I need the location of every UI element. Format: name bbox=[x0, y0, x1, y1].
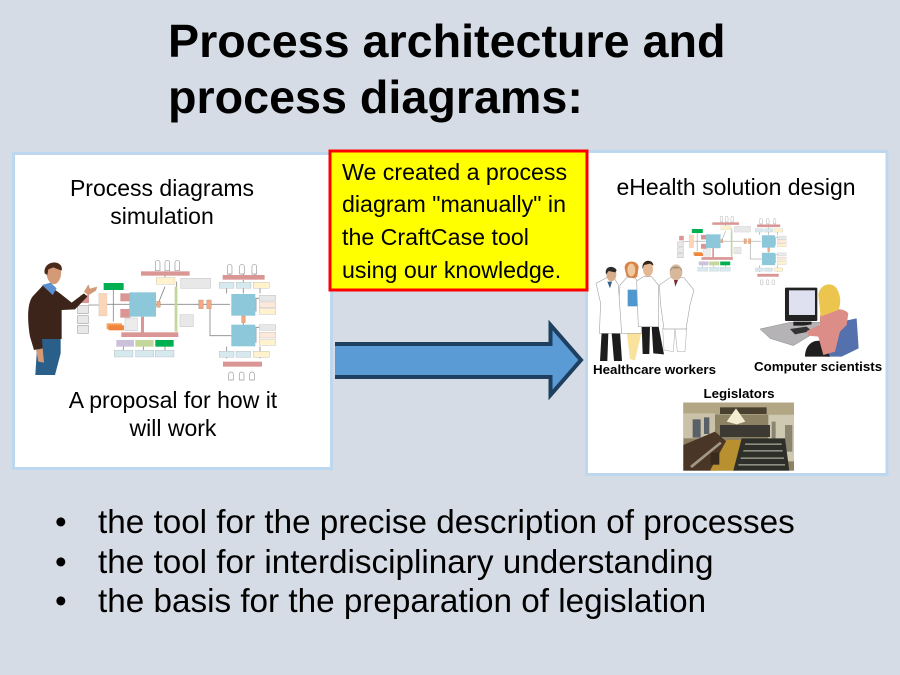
label: healthcare workers: Healthcare workers bbox=[593, 362, 716, 377]
icon: presenter bbox=[28, 263, 97, 375]
photo: parliament chamber bbox=[683, 403, 794, 471]
bullet 2: • bbox=[55, 544, 67, 581]
bullet list bbox=[55, 504, 795, 620]
bullet 3: the basis for the preparation of legislation bbox=[98, 583, 706, 620]
callout: yellow box: using our knowledge. bbox=[342, 257, 561, 283]
icon: computer scientist bbox=[760, 284, 859, 357]
icon: healthcare workers bbox=[596, 261, 694, 361]
bullet 1: the tool for the precise description of processes bbox=[98, 504, 795, 541]
label: computer scientists: Computer scientists bbox=[754, 359, 882, 374]
panel caption: a proposal: will work bbox=[129, 415, 217, 441]
panel heading: process diagrams simulation: Process diagrams bbox=[70, 175, 254, 201]
callout: yellow box: We created a process bbox=[342, 159, 567, 185]
callout: yellow box: diagram "manually" in bbox=[342, 191, 566, 217]
bullet 2: the tool for interdisciplinary understanding bbox=[98, 544, 713, 581]
process diagram: large bbox=[78, 260, 276, 380]
bullet 3: • bbox=[55, 583, 67, 620]
panel heading: process diagrams simulation: simulation bbox=[110, 203, 214, 229]
process diagram: small bbox=[678, 216, 786, 284]
bullet 1: • bbox=[55, 504, 67, 541]
arrow bbox=[335, 325, 581, 395]
callout: yellow box bbox=[330, 151, 587, 290]
panel: process diagrams simulation bbox=[14, 154, 332, 468]
panel: eHealth solution design bbox=[586, 152, 887, 474]
panel caption: a proposal: A proposal for how it bbox=[69, 387, 277, 413]
label: legislators: Legislators bbox=[703, 386, 775, 401]
panel heading: eHealth solution design: eHealth solution design bbox=[616, 174, 856, 200]
title: Process architecture and bbox=[168, 15, 726, 67]
callout: yellow box: the CraftCase tool bbox=[342, 224, 529, 250]
title: process diagrams: bbox=[168, 71, 583, 123]
